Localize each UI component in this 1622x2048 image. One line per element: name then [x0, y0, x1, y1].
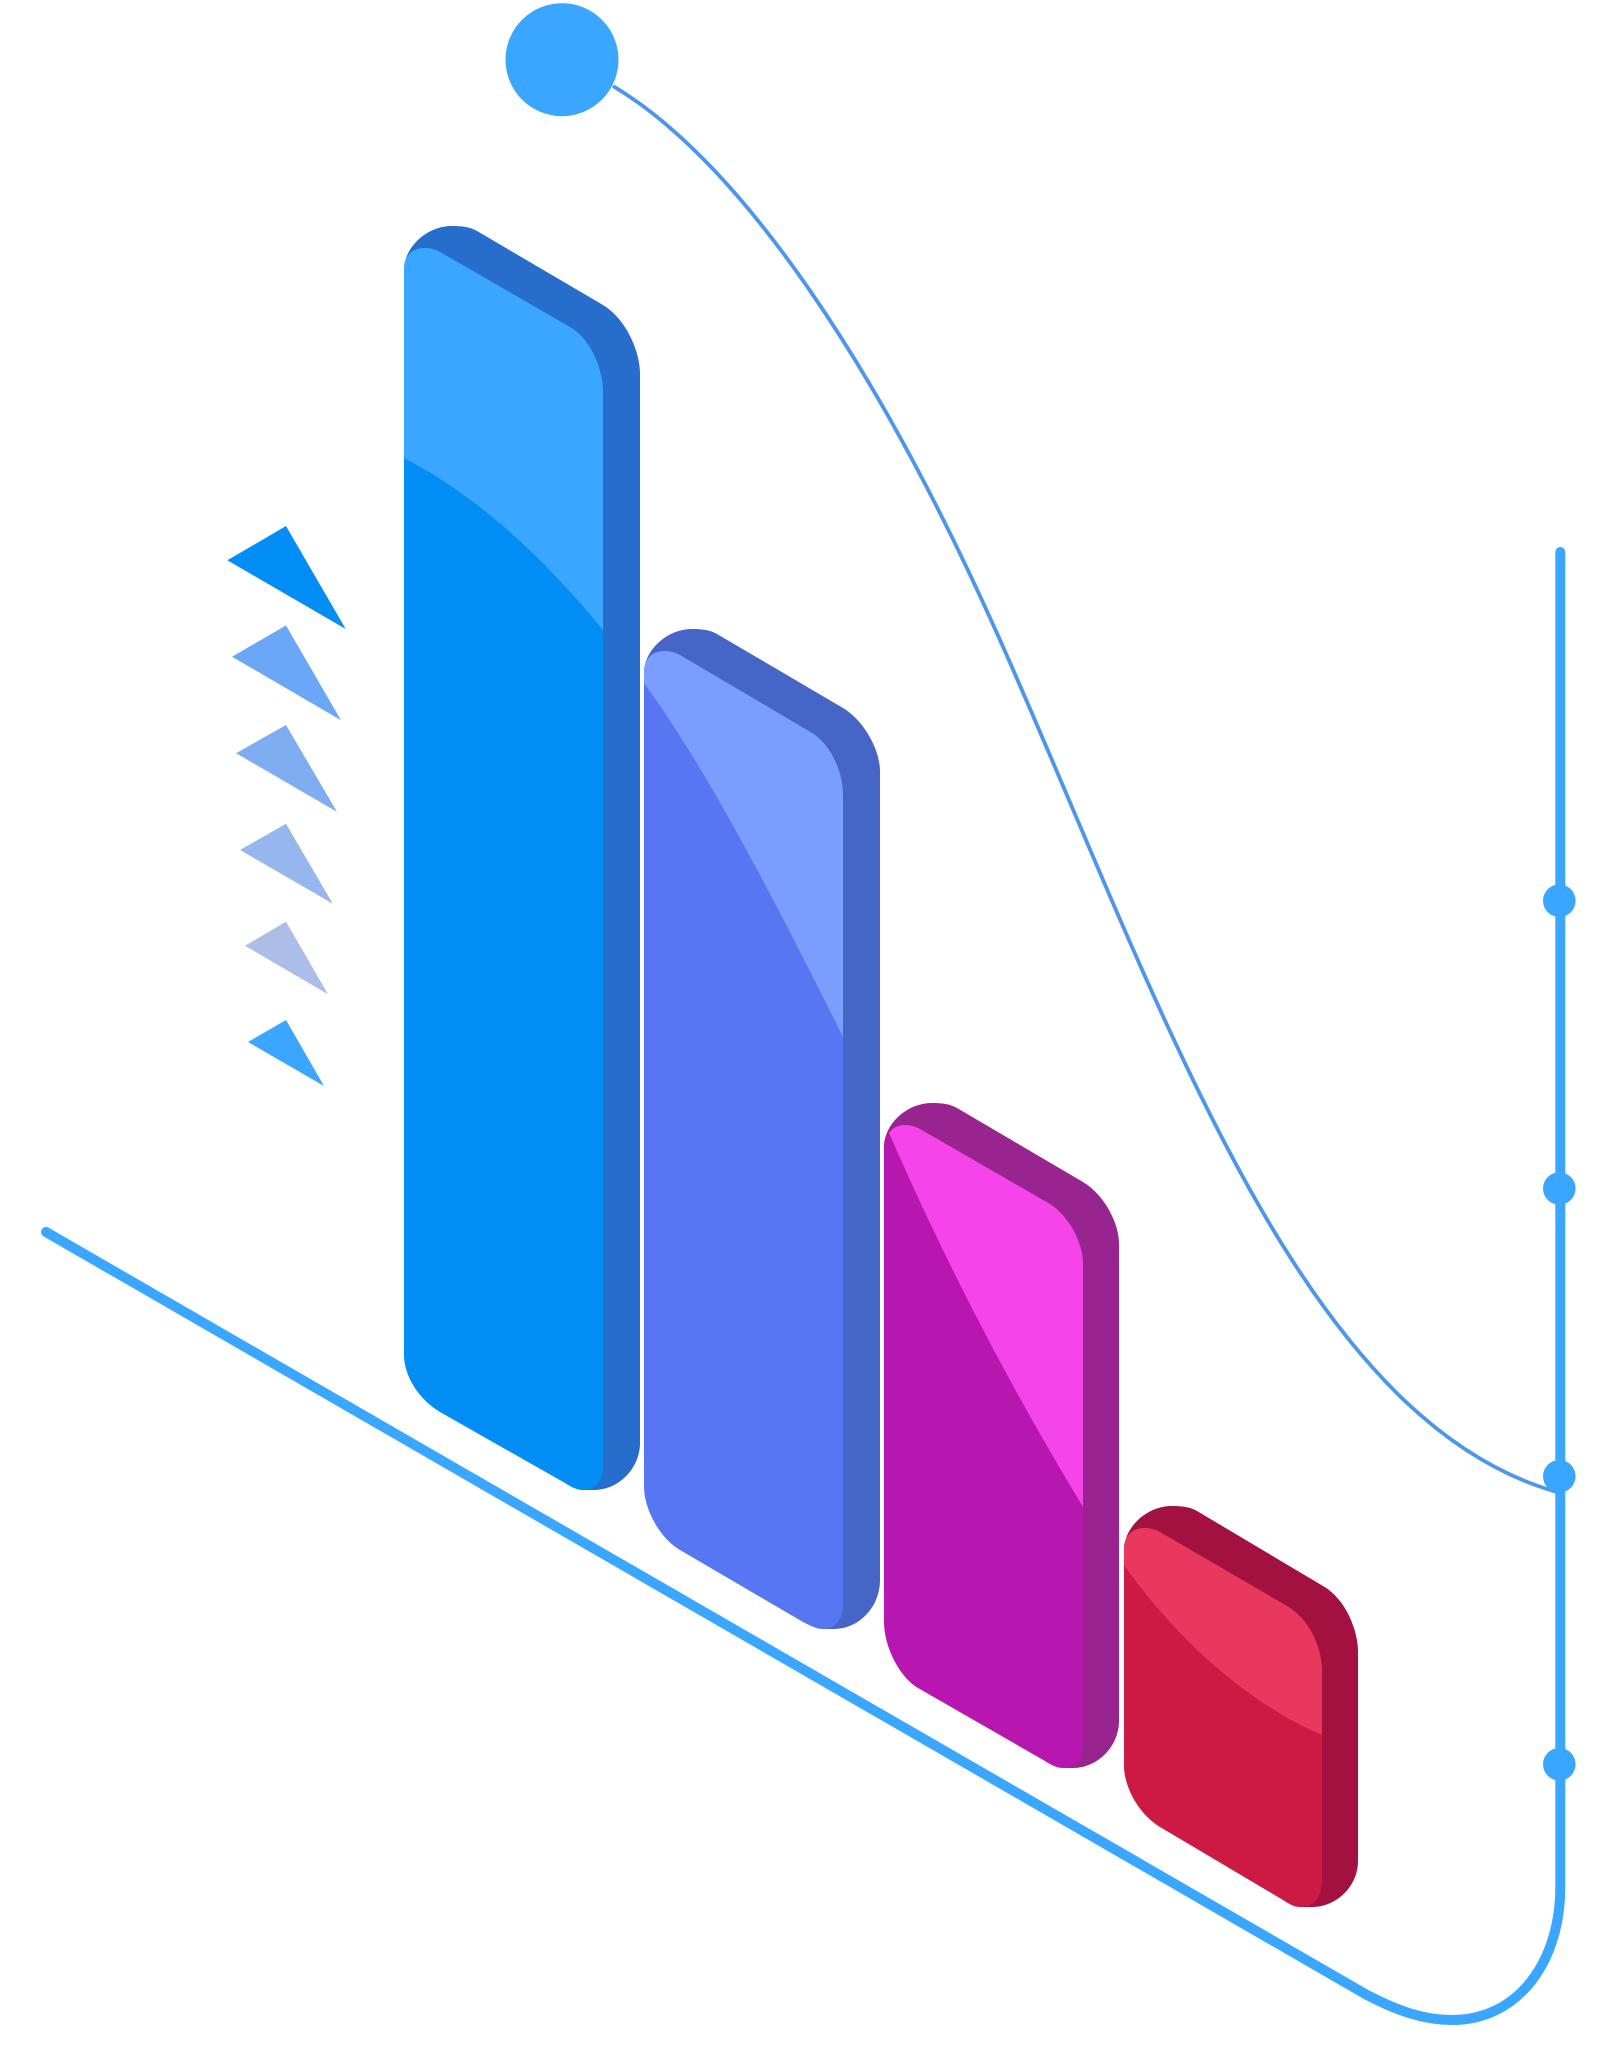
trend curve [613, 86, 1557, 1492]
axis tick dots [1543, 884, 1576, 1781]
bar 4: red [1124, 1506, 1358, 1907]
triangle 1 [227, 526, 346, 629]
legend triangles [227, 526, 346, 1086]
triangle 3 [236, 725, 337, 812]
triangle 6 [248, 1020, 324, 1086]
triangle 2 [232, 625, 341, 720]
axis line: baseline and right vertical [46, 552, 1560, 2020]
bar 2: indigo [644, 629, 880, 1629]
bar 1: blue [404, 226, 640, 1490]
triangle 4 [240, 824, 333, 904]
big circle: curve start [506, 3, 618, 116]
triangle 5 [245, 922, 328, 994]
bar 3: magenta [884, 1103, 1119, 1768]
